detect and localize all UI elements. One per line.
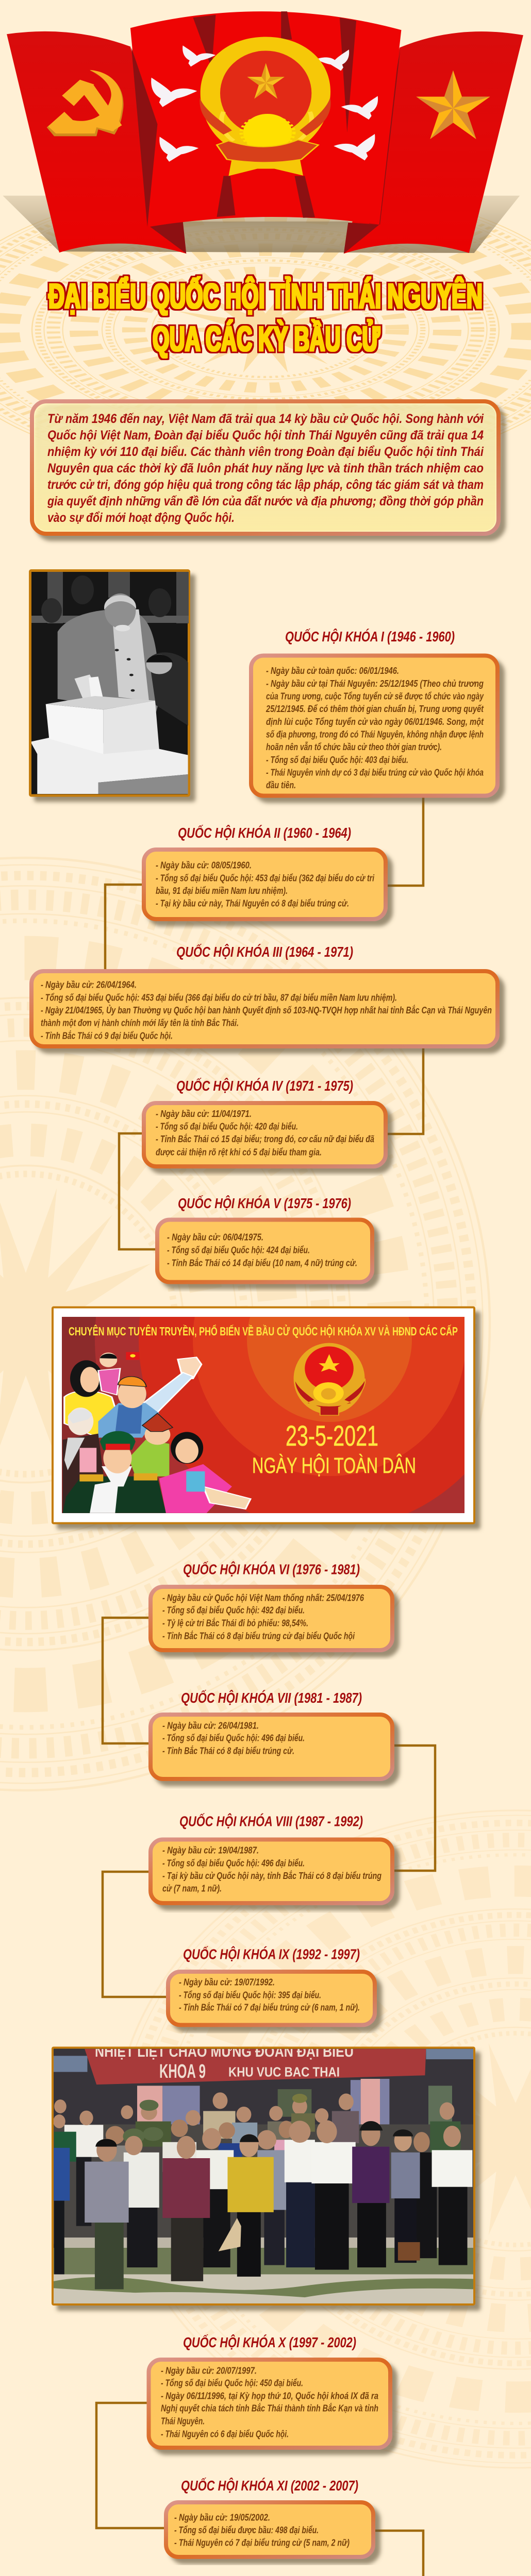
photo: đoàn đại biểu khóa 9 khu vực Bắc Thái — [53, 2043, 474, 2304]
panel: khóa VIII: - Tại kỳ bầu cử Quốc hội này, tỉnh Bắc Thái có 8 đại biểu trúng — [162, 1870, 381, 1881]
title — [48, 276, 483, 359]
panel: khóa X — [148, 2360, 390, 2448]
panel: khóa X: Nghị quyết chia tách tỉnh Bắc Thái thành tỉnh Bắc Kạn và tỉnh — [161, 2403, 378, 2413]
panel: khóa IV: - Tỉnh Bắc Thái có 15 đại biểu; trong đó, cơ cấu nữ đại biểu đã — [156, 1133, 375, 1144]
panel: khóa II: - Tổng số đại biểu Quốc hội: 453 đại biểu (362 đại biểu do cử tri — [156, 873, 375, 883]
panel: khóa V: - Ngày bầu cử: 06/04/1975. — [167, 1231, 263, 1243]
panel: khóa VII: - Tổng số đại biểu Quốc hội: 496 đại biểu. — [162, 1732, 305, 1743]
panel: khóa I: đầu tiên. — [266, 779, 296, 790]
connector: khóa I to II — [388, 798, 423, 886]
title: QUA CÁC KỲ BẦU CỬ — [153, 319, 380, 359]
connector: khóa VIII to IX — [103, 1872, 166, 1997]
heading: khóa II: QUỐC HỘI KHÓA II (1960 - 1964) — [178, 824, 351, 841]
panel: khóa IV: - Tổng số đại biểu Quốc hội: 420 đại biểu. — [156, 1121, 298, 1131]
panel: centre flag with national emblem — [130, 11, 401, 227]
panel: khóa XI: - Tổng số đại biểu được bầu: 498 đại biểu. — [174, 2524, 319, 2535]
heading: khóa I: QUỐC HỘI KHÓA I (1946 - 1960) — [285, 628, 455, 645]
panel: khóa VIII: cử (7 nam, 1 nữ). — [162, 1883, 222, 1894]
panel: khóa IX: - Tổng số đại biểu Quốc hội: 395 đại biểu. — [179, 1990, 321, 2000]
panel: khóa II: - Ngày bầu cử: 08/05/1960. — [156, 859, 252, 871]
panel: khóa V — [157, 1220, 372, 1282]
heading: khóa VI: QUỐC HỘI KHÓA VI (1976 - 1981) — [183, 1561, 360, 1578]
photo: đoàn đại biểu khóa 9 khu vực Bắc Thái: NHIỆT LIỆT CHÀO MỪNG ĐOÀN ĐẠI BIỂU — [95, 2043, 354, 2060]
connector: khóa XI to XII — [375, 2531, 423, 2576]
panel: khóa V: - Tổng số đại biểu Quốc hội: 424 đại biểu. — [167, 1245, 310, 1255]
heading: khóa X: QUỐC HỘI KHÓA X (1997 - 2002) — [183, 2334, 356, 2350]
panel: khóa IV: - Ngày bầu cử: 11/04/1971. — [156, 1108, 252, 1119]
connector: khóa IV to V — [119, 1133, 155, 1249]
panel: khóa IV — [144, 1103, 386, 1166]
panel: khóa VII: - Ngày bầu cử: 26/04/1981. — [162, 1720, 259, 1731]
panel: khóa X: - Thái Nguyên có 6 đại biểu Quốc hội. — [161, 2429, 289, 2439]
panel: khóa IV: được cải thiện rõ rệt khi có 5 đại biểu tham gia. — [156, 1147, 322, 1157]
text: intro paragraph: Nguyên qua các thời kỳ đã luôn phát huy năng lực và tinh thần trách nhiệm cao — [47, 461, 484, 476]
panel: khóa I: - Ngày bầu cử toàn quốc: 06/01/1946. — [266, 665, 399, 676]
background pattern: bronze drum right — [113, 1810, 531, 2468]
photo: đoàn đại biểu khóa 9 khu vực Bắc Thái: KHOA 9 — [159, 2061, 206, 2082]
heading: khóa VIII: QUỐC HỘI KHÓA VIII (1987 - 1992) — [179, 1812, 363, 1829]
heading: khóa IV: QUỐC HỘI KHÓA IV (1971 - 1975) — [176, 1077, 353, 1094]
panel: khóa III: - Tỉnh Bắc Thái có 9 đại biểu Quốc hội. — [41, 1030, 173, 1041]
text: intro paragraph: Quốc hội Việt Nam, Đoàn đại biểu Quốc hội tỉnh Thái Nguyên cũng đã trải qua 14 — [47, 428, 484, 443]
panel: khóa VII — [151, 1715, 392, 1779]
text: intro paragraph — [47, 412, 484, 525]
photo: đoàn đại biểu khóa 9 khu vực Bắc Thái: KHU VUC BAC THAI — [228, 2064, 340, 2079]
icon: gold star — [416, 71, 490, 139]
panel: khóa X: - Tổng số đại biểu Quốc hội: 450 đại biểu. — [161, 2377, 303, 2388]
connector: khóa II to III — [105, 885, 142, 969]
icon: white doves — [151, 45, 378, 162]
panel: khóa I — [251, 655, 497, 795]
text: intro paragraph: vào sự đổi mới hoạt động Quốc hội. — [47, 511, 235, 525]
heading: khóa IX: QUỐC HỘI KHÓA IX (1992 - 1997) — [183, 1945, 360, 1962]
panel: khóa VIII: - Ngày bầu cử: 19/04/1987. — [162, 1844, 259, 1856]
icon: hammer and sickle — [47, 70, 124, 136]
connector: khóa VII to VIII — [394, 1745, 435, 1871]
heading: khóa III: QUỐC HỘI KHÓA III (1964 - 1971) — [176, 943, 353, 960]
text: intro paragraph: nhiệm kỳ với 110 đại biểu. Các thành viên trong Đoàn đại biểu Quốc hội tỉnh Thái — [47, 445, 484, 459]
panel: khóa II: bầu, 91 đại biểu miền Nam lưu nhiệm). — [156, 885, 288, 896]
panel: khóa III: - Tổng số đại biểu Quốc hội: 453 đại biểu (366 đại biểu do cử tri bầu, 87 đại biểu miền Nam lưu nhiệm). — [41, 992, 397, 1003]
panel: khóa III: - Ngày bầu cử: 26/04/1964. — [41, 979, 137, 990]
panel: khóa VI: - Ngày bầu cử Quốc hội Việt Nam thống nhất: 25/04/1976 — [162, 1592, 364, 1603]
panel: khóa IX: - Tỉnh Bắc Thái có 7 đại biểu trúng cử (6 nam, 1 nữ). — [179, 2002, 360, 2012]
panel: khóa X: - Ngày 06/11/1996, tại Kỳ họp thứ 10, Quốc hội khoá IX đã ra — [161, 2391, 378, 2401]
panel: khóa VIII: - Tổng số đại biểu Quốc hội: 496 đại biểu. — [162, 1858, 305, 1868]
illustration: group of delegates — [53, 2092, 472, 2289]
panel: khóa X: - Ngày bầu cử: 20/07/1997. — [161, 2365, 257, 2376]
panel: intro — [32, 401, 499, 534]
illustration: citizens — [63, 1352, 251, 1513]
connector: khóa X to XI — [96, 2403, 164, 2528]
panel: khóa VII: - Tỉnh Bắc Thái có 8 đại biểu trúng cử. — [162, 1745, 294, 1756]
panel: khóa IX — [168, 1972, 375, 2025]
connector: khóa VI to VII — [103, 1618, 148, 1743]
panel: khóa III: thành một đơn vị hành chính mới lấy tên là tỉnh Bắc Thái. — [41, 1017, 239, 1028]
panel: khóa I: hoãn nên vẫn tổ chức bầu cử theo thời gian trước). — [266, 741, 442, 752]
panel: khóa XI — [166, 2502, 373, 2557]
icon: emblem — [294, 1343, 365, 1415]
panel: khóa VI — [151, 1587, 392, 1650]
panel: left flag with hammer and sickle — [7, 31, 186, 253]
panel: right flag with star — [344, 31, 523, 253]
panel: khóa V: - Tỉnh Bắc Thái có 14 đại biểu (10 nam, 4 nữ) trúng cử. — [167, 1257, 357, 1268]
icon: national emblem — [200, 37, 330, 176]
background pattern: bronze drum left — [0, 858, 490, 1790]
panel: khóa VIII — [151, 1839, 392, 1903]
panel: khóa I: - Tổng số đại biểu Quốc hội: 403 đại biểu. — [266, 754, 408, 765]
panel: khóa XI: - Thái Nguyên có 7 đại biểu trúng cử (5 nam, 2 nữ) — [174, 2537, 350, 2548]
panel: khóa X: Thái Nguyên. — [161, 2415, 205, 2427]
poster: ngày hội toàn dân 23-5-2021: 23-5-2021 — [286, 1419, 378, 1452]
heading: khóa XI: QUỐC HỘI KHÓA XI (2002 - 2007) — [181, 2477, 358, 2494]
header: flag display with emblem — [3, 11, 523, 253]
heading: khóa VII: QUỐC HỘI KHÓA VII (1981 - 1987) — [181, 1689, 362, 1706]
panel: khóa II: - Tại kỳ bầu cử này, Thái Nguyên có 8 đại biểu trúng cử. — [156, 897, 349, 909]
photo: voting in 1946 — [30, 571, 189, 795]
poster: ngày hội toàn dân 23-5-2021 — [52, 1307, 484, 1532]
panel: khóa VI: - Tỉnh Bắc Thái có 8 đại biểu trúng cử đại biểu Quốc hội — [162, 1630, 355, 1641]
panel: khóa III — [31, 971, 497, 1046]
panel: khóa XI: - Ngày bầu cử: 19/05/2002. — [174, 2512, 270, 2522]
poster: ngày hội toàn dân 23-5-2021: NGÀY HỘI TOÀN DÂN — [252, 1453, 416, 1478]
background pattern: bronze drum top — [0, 183, 531, 477]
panel: khóa VI: - Tỷ lệ cử tri Bắc Thái đi bỏ phiếu: 98,54%. — [162, 1618, 308, 1628]
panel: khóa II — [144, 850, 386, 919]
panel: khóa VI: - Tổng số đại biểu Quốc hội: 492 đại biểu. — [162, 1604, 305, 1616]
panel: khóa IX: - Ngày bầu cử: 19/07/1992. — [179, 1976, 275, 1988]
heading: khóa V: QUỐC HỘI KHÓA V (1975 - 1976) — [178, 1195, 351, 1211]
connector: khóa III to IV — [388, 1048, 423, 1134]
